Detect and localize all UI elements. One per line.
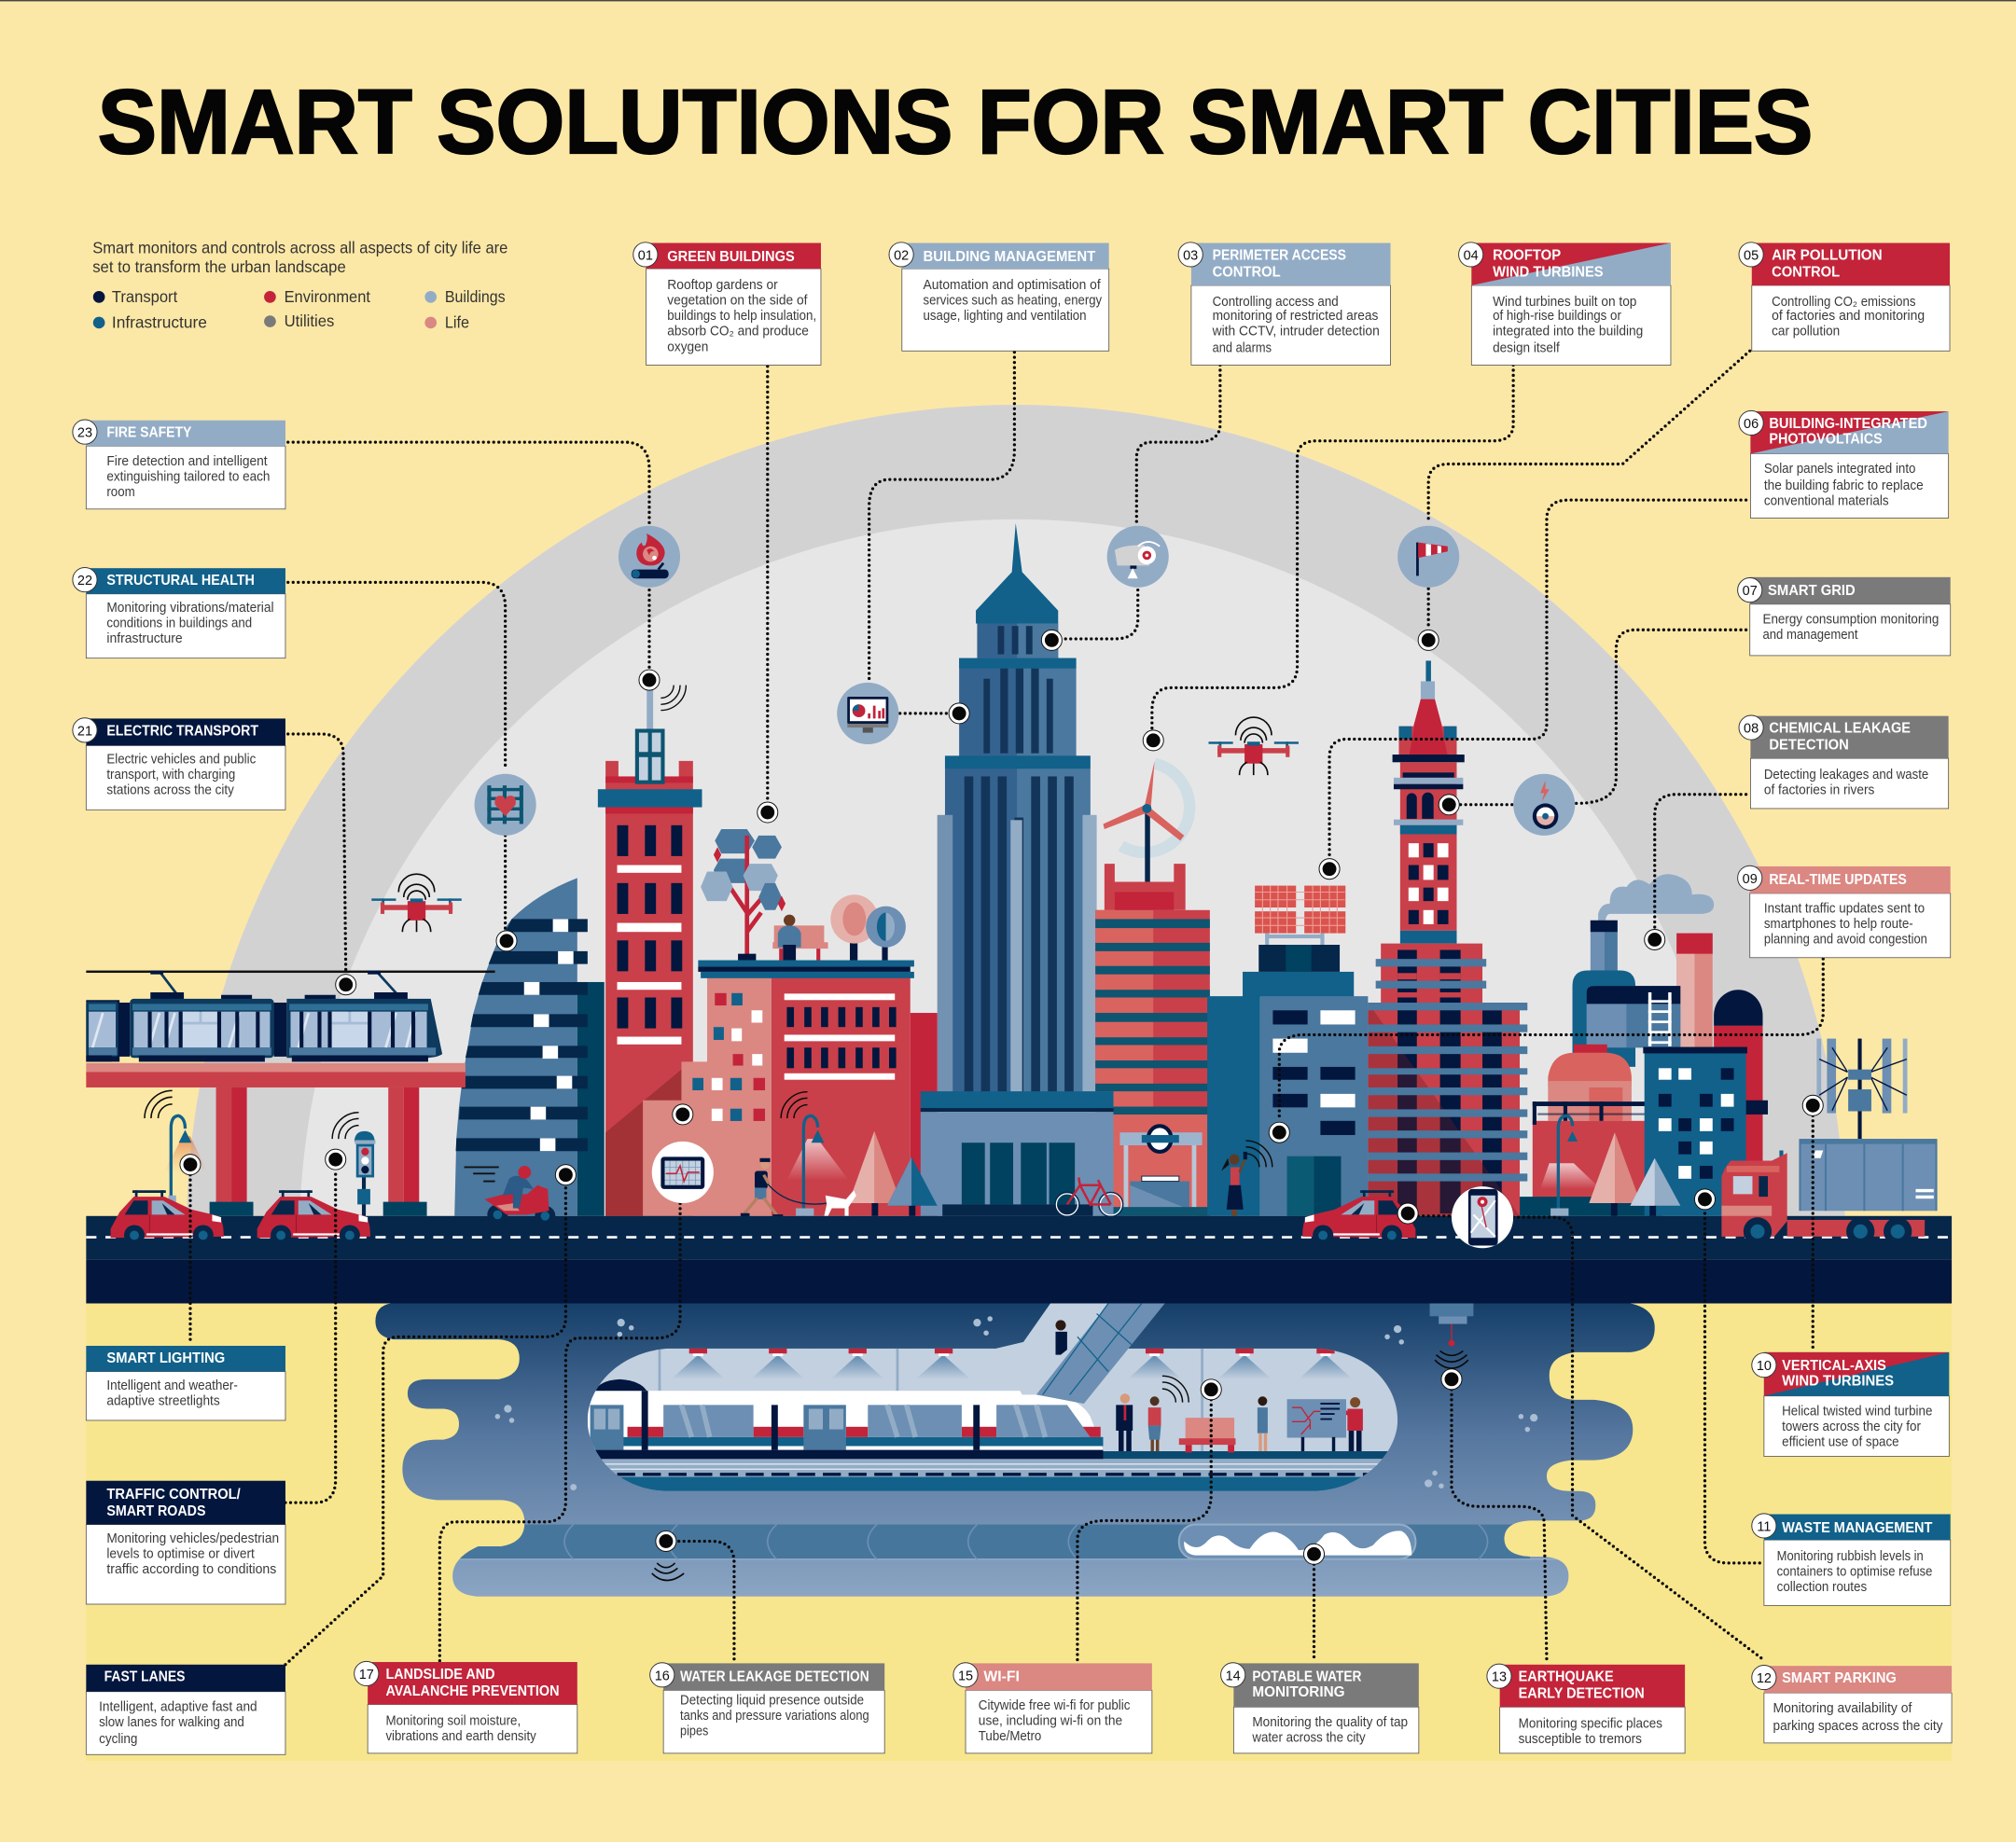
callout 23: fire safety: room <box>106 485 135 500</box>
metro station <box>565 1349 1414 1492</box>
jogger <box>741 1158 836 1216</box>
vertical-axis wind turbine <box>1816 1039 1908 1139</box>
callout 16: water leakage detection: pipes <box>680 1724 708 1739</box>
icon: fast lane tablet <box>652 1142 714 1203</box>
street lamp middle <box>786 1115 849 1216</box>
callout 15: wi-fi: WI-FI <box>983 1669 1020 1685</box>
callout 21: electric transport: ELECTRIC TRANSPORT <box>106 723 258 739</box>
dog <box>824 1190 856 1216</box>
callout 09: real-time updates <box>1738 866 1951 958</box>
callout 15: wi-fi: 15 <box>958 1669 973 1683</box>
callout 01: green buildings: oxygen <box>667 339 708 354</box>
callout 13: earthquake early detection: Monitoring specific places <box>1519 1716 1662 1731</box>
callout: traffic control smart roads <box>86 1481 285 1604</box>
callout 23: fire safety: extinguishing tailored to each <box>106 469 270 484</box>
callout 04: rooftop wind turbines: 04 <box>1464 248 1479 263</box>
callout 22: structural health: STRUCTURAL HEALTH <box>106 573 255 589</box>
icon: smoke cloud <box>1598 874 1714 932</box>
callout 21: electric transport: stations across the city <box>106 783 235 798</box>
top edge line <box>0 0 2016 1</box>
callout 06: building-integrated photovoltaics: Solar panels integrated into <box>1764 462 1916 477</box>
callout 03: perimeter access control: with CCTV, intruder detection <box>1212 325 1380 339</box>
pavement trees <box>849 1131 938 1216</box>
electric tram <box>86 971 442 1061</box>
red car two <box>257 1190 370 1245</box>
callout 06: building-integrated photovoltaics: conventional materials <box>1764 494 1889 509</box>
callout 14: potable water monitoring: water across the city <box>1251 1730 1366 1745</box>
callout 12: smart parking: Monitoring availability of <box>1773 1701 1912 1716</box>
callout 08: chemical leakage detection: CHEMICAL LEAKAGE <box>1769 721 1911 737</box>
central skyscraper <box>938 523 1097 1092</box>
callout 12: smart parking: SMART PARKING <box>1782 1670 1897 1686</box>
icon: smart grid meter <box>1513 774 1575 836</box>
callout 04: rooftop wind turbines: ROOFTOP <box>1493 247 1562 263</box>
callout 05: air pollution control: AIR POLLUTION <box>1772 247 1883 263</box>
callout 21: electric transport: transport, with charging <box>106 768 235 783</box>
callout 10: vertical-axis wind turbines: VERTICAL-AXIS <box>1782 1358 1886 1374</box>
callout: traffic control smart roads: TRAFFIC CONTROL/ <box>106 1487 241 1503</box>
callout 10: vertical-axis wind turbines: WIND TURBINES <box>1782 1374 1894 1390</box>
red office block with rooftop <box>643 961 938 1216</box>
icon: CCTV camera <box>1107 526 1169 588</box>
callout 22: structural health: Monitoring vibrations/material <box>106 601 274 616</box>
icon: rooftop wind turbine <box>1103 761 1189 881</box>
motorbike rider <box>465 1166 555 1226</box>
legend: Utilities <box>285 312 334 330</box>
train arch <box>595 1379 647 1450</box>
callout 21: electric transport: Electric vehicles and public <box>106 753 256 768</box>
callout: fast lanes: FAST LANES <box>104 1669 185 1685</box>
callout 06: building-integrated photovoltaics <box>1739 410 1949 518</box>
callout 02: building management <box>889 242 1109 351</box>
callout 13: earthquake early detection <box>1487 1664 1685 1753</box>
callout 22: structural health: infrastructure <box>106 631 183 646</box>
legend: Infrastructure <box>112 312 207 331</box>
rooftop discs <box>830 894 906 961</box>
rooftop garden tree <box>701 829 786 961</box>
callout 01: green buildings: buildings to help insulation, <box>667 309 816 324</box>
callout 21: electric transport: 21 <box>77 724 92 739</box>
callout: fast lanes: Intelligent, adaptive fast and <box>99 1699 257 1714</box>
callout 05: air pollution control: car pollution <box>1772 325 1840 339</box>
callout 07: smart grid <box>1738 577 1951 656</box>
icon: leak sound waves <box>652 1563 684 1581</box>
callout 13: earthquake early detection: susceptible to tremors <box>1519 1732 1642 1747</box>
intro text: set to transform the urban landscape <box>92 257 346 276</box>
callout 09: real-time updates: smartphones to help route- <box>1764 917 1913 932</box>
callout 22: structural health: conditions in buildings and <box>106 616 252 631</box>
red tower with antenna <box>598 687 702 1216</box>
callout 11: waste management: WASTE MANAGEMENT <box>1782 1520 1933 1536</box>
callout 06: building-integrated photovoltaics: BUILDING-INTEGRATED <box>1769 416 1927 432</box>
underground section <box>375 1304 1655 1597</box>
skyscraper base <box>921 1091 1114 1216</box>
wifi signals <box>145 686 1272 1167</box>
teal office block <box>1643 1047 1747 1216</box>
icon: seismic sensor probe <box>1430 1304 1473 1368</box>
callout 04: rooftop wind turbines: of high-rise buildings or <box>1493 309 1621 324</box>
callout 17: landslide and avalanche prevention: 17 <box>359 1668 374 1683</box>
icon: fire safety <box>619 526 680 588</box>
callout 16: water leakage detection: WATER LEAKAGE DETECTION <box>680 1669 869 1685</box>
callout 05: air pollution control: 05 <box>1744 248 1759 263</box>
callout 08: chemical leakage detection: of factories in rivers <box>1764 783 1874 798</box>
callout 13: earthquake early detection: EARLY DETECTION <box>1519 1686 1645 1702</box>
callout 16: water leakage detection: tanks and pressure variations along <box>680 1709 869 1724</box>
callout 16: water leakage detection <box>650 1663 884 1753</box>
callout 08: chemical leakage detection: DETECTION <box>1769 738 1849 754</box>
callout 04: rooftop wind turbines: integrated into the building <box>1493 325 1643 339</box>
callout: traffic control smart roads: levels to optimise or divert <box>106 1546 255 1561</box>
route map board <box>1287 1399 1346 1451</box>
callout: fast lanes: cycling <box>99 1732 137 1747</box>
callout 14: potable water monitoring: MONITORING <box>1252 1684 1345 1700</box>
callout 04: rooftop wind turbines <box>1459 242 1671 365</box>
callout 06: building-integrated photovoltaics: the building fabric to replace <box>1764 478 1924 493</box>
callout: traffic control smart roads: Monitoring vehicles/pedestrian <box>106 1531 279 1546</box>
red car three <box>1302 1190 1415 1245</box>
callout 06: building-integrated photovoltaics: PHOTOVOLTAICS <box>1769 432 1883 448</box>
callout 03: perimeter access control: Controlling access and <box>1213 295 1339 310</box>
callout: fast lanes: slow lanes for walking and <box>99 1715 244 1730</box>
callout 14: potable water monitoring <box>1221 1663 1419 1753</box>
lower panel background <box>86 1304 1952 1761</box>
callout 06: building-integrated photovoltaics: 06 <box>1744 417 1759 432</box>
turbine building <box>1095 761 1210 1216</box>
sensor markers <box>180 630 1823 1564</box>
callout 07: smart grid: and management <box>1762 628 1857 643</box>
callout 09: real-time updates: Instant traffic updates sent to <box>1764 902 1925 917</box>
legend: Environment <box>285 287 370 306</box>
callout 07: smart grid: 07 <box>1743 584 1758 599</box>
city skyline <box>86 523 1908 1216</box>
callout 09: real-time updates: planning and avoid congestion <box>1764 933 1927 948</box>
callout 03: perimeter access control: monitoring of restricted areas <box>1213 309 1378 324</box>
callout 23: fire safety: FIRE SAFETY <box>106 425 192 441</box>
callout 10: vertical-axis wind turbines: efficient use of space <box>1782 1434 1899 1449</box>
callout 05: air pollution control: Controlling CO₂ emissions <box>1772 295 1916 310</box>
callout 23: fire safety <box>73 420 285 509</box>
metro train <box>588 1391 1103 1461</box>
callout 16: water leakage detection: Detecting liquid presence outside <box>680 1694 864 1709</box>
callout 02: building management: services such as heating, energy <box>924 294 1103 309</box>
callout 03: perimeter access control: 03 <box>1183 248 1198 263</box>
callout 17: landslide and avalanche prevention <box>355 1661 577 1753</box>
callout 10: vertical-axis wind turbines: 10 <box>1757 1359 1772 1374</box>
callout 23: fire safety: 23 <box>77 426 92 441</box>
woman with phone <box>1221 1152 1247 1216</box>
escalator <box>996 1304 1165 1404</box>
callout 11: waste management: 11 <box>1757 1519 1771 1534</box>
icon: platform wifi <box>1162 1376 1189 1403</box>
overhead wire <box>86 971 495 973</box>
callout 12: smart parking: 12 <box>1757 1671 1772 1686</box>
callout: smart lighting: SMART LIGHTING <box>106 1350 225 1366</box>
callout 02: building management: usage, lighting and ventilation <box>924 309 1087 324</box>
cyclist bicycle <box>1055 1177 1123 1216</box>
callout 15: wi-fi: Citywide free wi-fi for public <box>979 1698 1130 1713</box>
drone left <box>371 874 462 932</box>
intro text: Smart monitors and controls across all aspects of city life are <box>92 239 507 257</box>
red clock tower <box>1368 660 1527 1216</box>
callout 01: green buildings: GREEN BUILDINGS <box>667 249 795 265</box>
callout: traffic control smart roads: traffic according to conditions <box>106 1562 276 1577</box>
road <box>86 1216 1952 1304</box>
callout 09: real-time updates: 09 <box>1743 872 1758 887</box>
callout 05: air pollution control: CONTROL <box>1772 264 1840 280</box>
callout 03: perimeter access control: CONTROL <box>1213 264 1281 280</box>
callout 12: smart parking <box>1752 1665 1952 1743</box>
callout 02: building management: Automation and optimisation of <box>924 278 1102 293</box>
icon: solar panels <box>1255 886 1345 934</box>
title: SMART SOLUTIONS FOR SMART CITIES <box>98 70 1813 173</box>
callout 04: rooftop wind turbines: WIND TURBINES <box>1493 264 1604 280</box>
callout 11: waste management <box>1752 1514 1951 1605</box>
callout 09: real-time updates: REAL-TIME UPDATES <box>1769 872 1907 888</box>
callout 01: green buildings: 01 <box>638 248 653 263</box>
callout 01: green buildings: vegetation on the side of <box>667 294 808 309</box>
platform and rails <box>565 1451 1414 1492</box>
callout 05: air pollution control <box>1739 242 1950 351</box>
icon: windsock <box>1397 526 1459 588</box>
callout 08: chemical leakage detection: 08 <box>1744 722 1759 737</box>
callout 01: green buildings: absorb CO₂ and produce <box>667 325 809 339</box>
callout 14: potable water monitoring: 14 <box>1226 1669 1241 1683</box>
callout 08: chemical leakage detection <box>1739 715 1949 809</box>
icon: building management monitor <box>837 683 898 744</box>
callout 01: green buildings <box>633 242 821 365</box>
callout 11: waste management: Monitoring rubbish levels in <box>1777 1549 1924 1564</box>
drone right <box>1208 717 1299 775</box>
callout 07: smart grid: Energy consumption monitoring <box>1762 612 1939 627</box>
callout 17: landslide and avalanche prevention: Monitoring soil moisture, <box>385 1714 521 1729</box>
legend: Transport <box>112 287 177 306</box>
water pipe <box>438 1525 1581 1559</box>
callout 08: chemical leakage detection: Detecting leakages and waste <box>1764 768 1928 783</box>
callout 13: earthquake early detection: 13 <box>1492 1670 1507 1685</box>
viaduct <box>86 1063 466 1216</box>
callout 17: landslide and avalanche prevention: LANDSLIDE AND <box>385 1667 495 1683</box>
person on bench <box>772 915 828 961</box>
callout 15: wi-fi: Tube/Metro <box>979 1729 1041 1744</box>
callout 13: earthquake early detection: EARTHQUAKE <box>1519 1669 1614 1685</box>
gherkin tower <box>454 878 605 1216</box>
trees <box>1589 1132 1680 1216</box>
callout 11: waste management: collection routes <box>1777 1580 1867 1595</box>
callout 23: fire safety: Fire detection and intelligent <box>106 454 268 469</box>
callout 01: green buildings: Rooftop gardens or <box>667 278 778 293</box>
callout: smart lighting: Intelligent and weather- <box>106 1378 238 1393</box>
callout 22: structural health <box>73 567 285 658</box>
callout 14: potable water monitoring: POTABLE WATER <box>1252 1669 1362 1685</box>
red car one <box>111 1190 224 1245</box>
callout 05: air pollution control: of factories and monitoring <box>1772 309 1925 324</box>
connection lines <box>190 351 1823 1665</box>
callout 03: perimeter access control <box>1178 242 1391 365</box>
callout 10: vertical-axis wind turbines: towers across the city for <box>1782 1420 1921 1434</box>
passengers <box>1116 1393 1363 1451</box>
street lamp <box>1540 1115 1601 1216</box>
callout 15: wi-fi <box>953 1663 1152 1753</box>
callout 10: vertical-axis wind turbines: Helical twisted wind turbine <box>1782 1404 1932 1419</box>
water level tank <box>1179 1525 1415 1559</box>
callout 03: perimeter access control: and alarms <box>1213 341 1272 356</box>
callout 12: smart parking: parking spaces across the city <box>1773 1719 1943 1734</box>
callout 17: landslide and avalanche prevention: vibrations and earth density <box>385 1729 536 1744</box>
callout 04: rooftop wind turbines: design itself <box>1493 341 1561 356</box>
callout 22: structural health: 22 <box>77 574 92 589</box>
bench <box>1179 1418 1235 1452</box>
street lamp left <box>163 1115 208 1209</box>
ceiling lights <box>671 1349 1353 1379</box>
callout 02: building management: 02 <box>894 248 909 263</box>
callout 14: potable water monitoring: Monitoring the quality of tap <box>1252 1715 1408 1730</box>
callout 11: waste management: containers to optimise refuse <box>1777 1565 1932 1580</box>
callout 15: wi-fi: use, including wi-fi on the <box>979 1714 1122 1729</box>
callout 03: perimeter access control: PERIMETER ACCESS <box>1213 247 1346 263</box>
legend: Buildings <box>445 287 506 306</box>
callout 04: rooftop wind turbines: Wind turbines built on top <box>1493 295 1636 310</box>
callout 07: smart grid: SMART GRID <box>1768 583 1856 599</box>
callout: smart lighting: adaptive streetlights <box>106 1393 220 1408</box>
underground station entrance <box>1114 1107 1210 1216</box>
callout: fast lanes <box>86 1665 285 1754</box>
bubbles <box>495 1316 1537 1490</box>
icon: real-time map phone <box>1452 1186 1513 1248</box>
callout 17: landslide and avalanche prevention: AVALANCHE PREVENTION <box>385 1683 560 1699</box>
truck <box>1721 1139 1937 1245</box>
legend: Life <box>445 312 469 331</box>
callout: traffic control smart roads: SMART ROADS <box>106 1503 206 1519</box>
icon: structural health <box>475 774 536 836</box>
callout 21: electric transport <box>73 718 285 810</box>
sky dome arcs <box>187 405 1844 1216</box>
legend <box>93 287 506 331</box>
solar panel building <box>1207 886 1368 1216</box>
callout: smart lighting <box>86 1346 285 1420</box>
callout 02: building management: BUILDING MANAGEMENT <box>924 249 1096 265</box>
factory complex <box>1520 874 1768 1216</box>
traffic light <box>355 1131 375 1216</box>
intro text <box>92 239 507 276</box>
callout 16: water leakage detection: 16 <box>655 1669 670 1683</box>
callout 10: vertical-axis wind turbines <box>1752 1352 1949 1457</box>
